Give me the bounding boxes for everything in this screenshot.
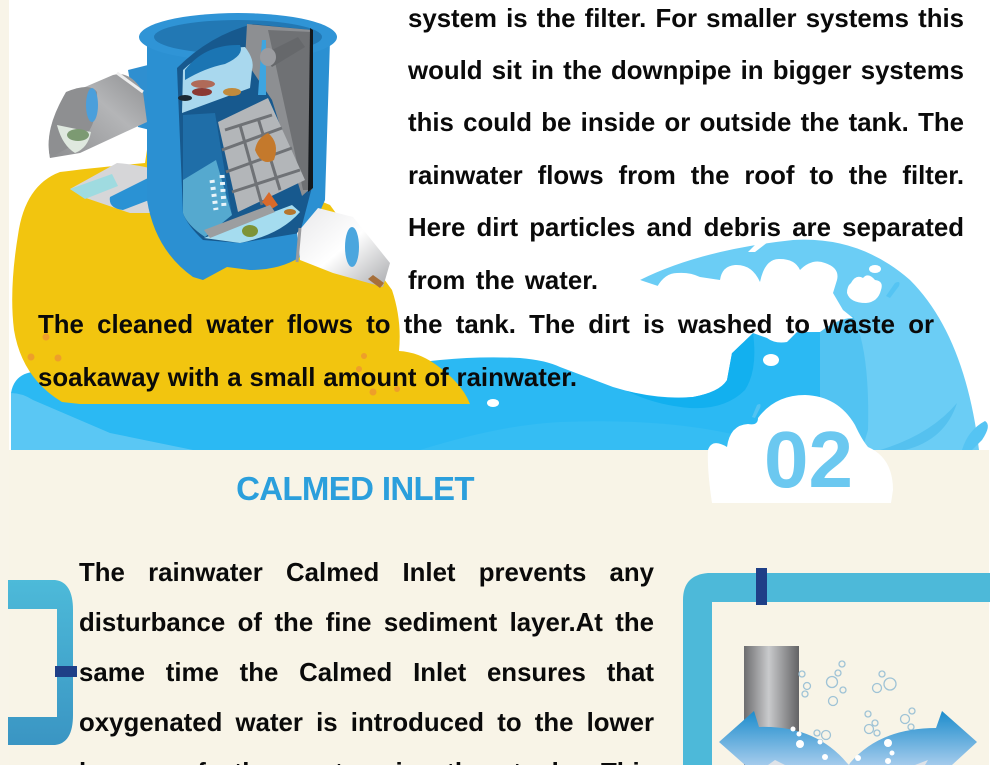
text block: filter description <box>38 5 964 392</box>
pipe joint <box>756 568 767 605</box>
text block: calmed inlet description: The rainwater Calmed Inlet prevents any <box>79 559 654 587</box>
wave illustration <box>11 240 988 450</box>
inlet pipe <box>49 65 162 158</box>
heading: calmed inlet: CALMED INLET <box>236 470 474 507</box>
cream lower panel <box>9 450 989 765</box>
text block: calmed inlet description: oxygenated water is introduced to the lower <box>79 709 654 737</box>
text block: filter description: system is the filter. For smaller systems this <box>408 5 964 33</box>
text block: filter description: soakaway with a small amount of rainwater. <box>38 364 577 392</box>
text block: filter description: from the water. <box>408 267 598 295</box>
text block: filter description: rainwater flows from the roof to the filter. <box>408 162 964 190</box>
air bubbles <box>799 661 915 744</box>
right pipe frame <box>683 568 990 765</box>
foam crest <box>640 259 853 353</box>
calmed inlet pipe <box>744 646 799 765</box>
text block: filter description: The cleaned water flows to the tank. The dirt is washed to waste or <box>38 311 934 339</box>
icon: rainwater filter cutaway <box>49 13 390 288</box>
text block: filter description: would sit in the downpipe in bigger systems <box>408 57 964 85</box>
pipe joint <box>55 666 77 677</box>
left pipe frame <box>8 580 77 745</box>
text block: filter description: Here dirt particles and debris are separated <box>408 214 964 242</box>
text block: calmed inlet description <box>79 559 654 765</box>
text block: filter description: this could be inside or outside the tank. The <box>408 109 964 137</box>
text block: calmed inlet description: disturbance of the fine sediment layer.At the <box>79 609 654 637</box>
tank body <box>139 13 337 280</box>
cloud badge 02 <box>708 395 893 504</box>
flow arrows <box>719 711 977 765</box>
tank interior <box>177 24 313 243</box>
outlet to soakaway <box>70 163 157 213</box>
yellow blob <box>12 130 470 404</box>
outlet pipe <box>297 208 390 288</box>
cloud badge 02: 02 <box>764 415 853 504</box>
text block: calmed inlet description: same time the Calmed Inlet ensures that <box>79 659 654 687</box>
